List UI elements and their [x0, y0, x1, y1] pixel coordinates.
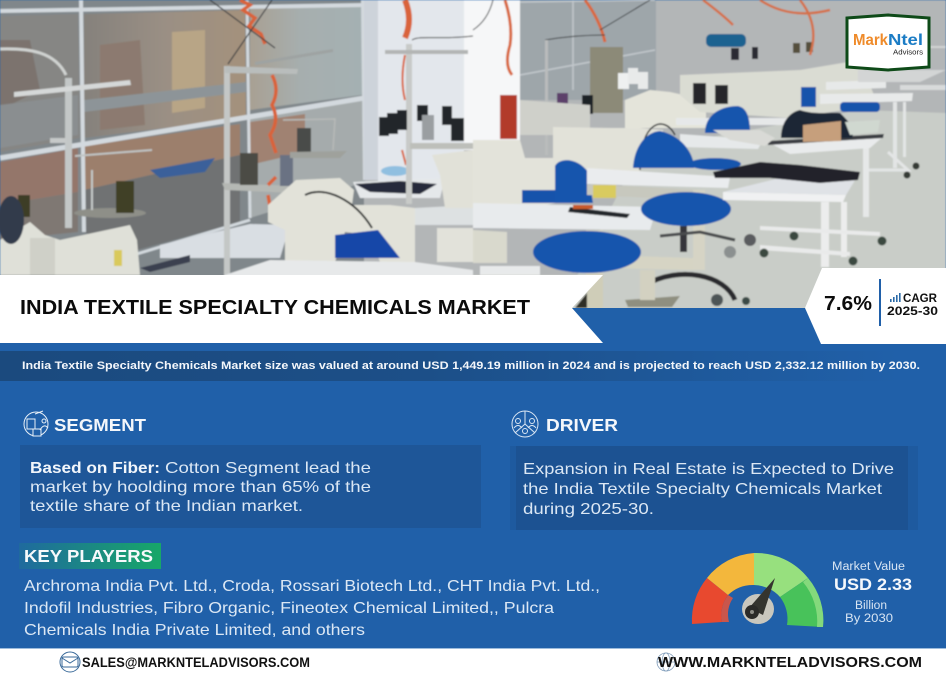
key players heading: KEY PLAYERS	[24, 546, 153, 566]
icon: segment globe	[24, 411, 48, 436]
front cream sewing machines	[473, 124, 675, 208]
CAGR value: 7.6%	[824, 293, 872, 315]
icon: growth bars	[890, 293, 901, 302]
market value callout: USD 2.33	[834, 575, 912, 594]
market size summary strip	[0, 351, 946, 381]
front white tables	[473, 168, 730, 280]
cardboard box and dark cloth	[713, 110, 880, 146]
panel: driver: the India Textile Specialty Chemicals Market	[523, 481, 883, 498]
key players heading	[19, 543, 161, 569]
website address: WWW.MARKNTELADVISORS.COM	[658, 654, 922, 671]
driver heading: DRIVER	[546, 415, 618, 435]
key players list: Indofil Industries, Fibro Organic, Fineotex Chemical Limited,, Pulcra	[24, 600, 554, 617]
blue chair seats	[533, 192, 735, 273]
market value callout	[832, 561, 912, 625]
email address: SALES@MARKNTELADVISORS.COM	[82, 655, 310, 670]
blue chairs	[522, 106, 750, 203]
key players list: Chemicals India Private Limited, and others	[24, 622, 365, 639]
panel: segment: Based on Fiber:	[30, 460, 160, 477]
panel: driver: during 2025-30.	[523, 501, 654, 518]
market value callout: Market Value	[832, 561, 905, 573]
back machines and shelving	[473, 0, 946, 155]
icon: email	[60, 652, 80, 672]
logo: MarkNtel Advisors: Ntel	[888, 32, 923, 49]
title: INDIA TEXTILE SPECIALTY CHEMICALS MARKET	[20, 296, 530, 319]
CAGR badge	[805, 268, 946, 344]
panel: segment: textile share of the Indian market.	[30, 498, 303, 515]
market size summary strip: India Textile Specialty Chemicals Market size was valued at around USD 1,449.19 million in 2024 and is projected to reach USD 2,332.12 million by 2030.	[22, 360, 920, 372]
panel: segment	[20, 445, 481, 528]
segment heading	[24, 411, 146, 436]
logo: MarkNtel Advisors: Mark	[853, 32, 888, 49]
logo: MarkNtel Advisors	[847, 15, 929, 70]
title banner	[0, 275, 603, 343]
panel: driver: Expansion in Real Estate is Expected to Drive	[523, 461, 894, 478]
photo: textile factory sewing floor	[0, 0, 946, 310]
gauge chart	[692, 553, 823, 627]
logo: MarkNtel Advisors: Advisors	[893, 48, 923, 56]
blue page background	[0, 308, 946, 648]
CAGR label: CAGR	[903, 293, 938, 305]
walls and floor	[364, 0, 946, 310]
key players list: Archroma India Pvt. Ltd., Croda, Rossari Biotech Ltd., CHT India Pvt. Ltd.,	[24, 578, 600, 595]
footer bar	[0, 648, 946, 674]
panel: segment: Cotton Segment lead the	[165, 460, 371, 477]
segment heading: SEGMENT	[54, 415, 146, 435]
far right white tables	[680, 102, 920, 217]
icon: web globe	[657, 653, 675, 671]
right front table with cloth	[713, 162, 886, 267]
panel: segment: market by hoolding more than 65% of the	[30, 479, 371, 496]
market value callout: Billion	[855, 600, 887, 612]
panel: driver	[510, 446, 918, 530]
second thread stand and table	[140, 0, 347, 278]
centre sewing machines	[225, 0, 473, 280]
icon: driver people circle	[512, 411, 538, 437]
driver heading	[512, 411, 618, 437]
CAGR period: 2025-30	[887, 304, 938, 318]
key players list	[24, 578, 600, 639]
left sewing machine	[0, 49, 152, 275]
window glass wall	[0, 0, 365, 256]
market value callout: By 2030	[845, 613, 893, 625]
floor strip under banner	[473, 266, 750, 308]
